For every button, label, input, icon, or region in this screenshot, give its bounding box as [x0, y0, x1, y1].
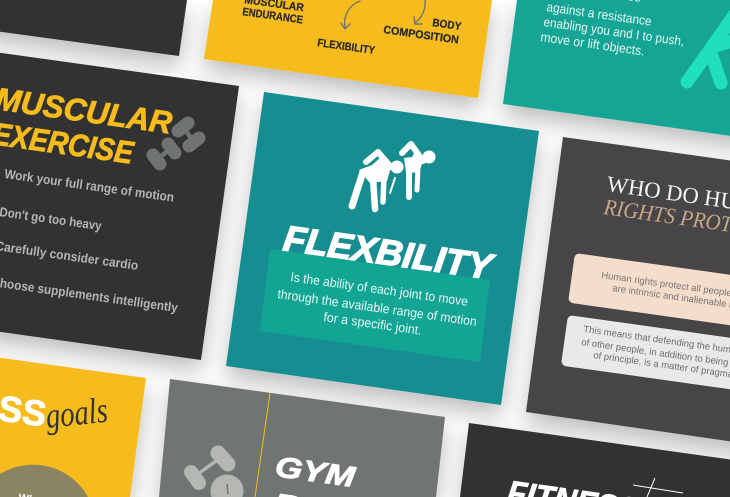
text: definition: for a specific joint. [323, 309, 423, 338]
heading: gym: GYM [273, 451, 358, 494]
text: strength description: enabling you and I to push, [543, 14, 685, 49]
card: muscular exercise [0, 50, 239, 360]
text: definition [277, 269, 478, 338]
card: dark top left [0, 0, 187, 56]
card: gym [159, 379, 445, 497]
label: flexibility: FLEXIBILITY [317, 37, 376, 57]
heading: muscular exercise [0, 80, 175, 171]
text: definition: Is the ability of each joint to move [290, 269, 469, 309]
card: yellow fitness goals [0, 355, 146, 497]
circle: olive badge [0, 465, 88, 497]
list: exercise tips: Don't go too heavy [0, 204, 103, 233]
card: human rights [526, 137, 730, 447]
script: goals: goals [44, 390, 109, 436]
label: body composition: BODY [432, 17, 463, 33]
icon: bright figure [687, 14, 730, 83]
icon: stretching figures [352, 144, 436, 209]
text: strength description: against a resistance [546, 0, 653, 29]
box: grey statement: This means that defending the hum [583, 324, 730, 356]
card: teal strength [503, 0, 730, 140]
text: strength description [540, 0, 685, 59]
label: muscular endurance [242, 0, 305, 26]
list: exercise tips: Work your full range of motion [4, 166, 175, 205]
divider line [255, 393, 270, 497]
label: muscular endurance: ENDURANCE [242, 6, 304, 26]
text: strength description: move or lift objects. [540, 29, 646, 59]
box: grey statement: of principle, is a matter of pragma [593, 350, 730, 381]
list: exercise tips [0, 166, 180, 315]
arrow: to body composition [414, 0, 425, 24]
icon: dumbbell and clock [191, 453, 244, 497]
panel: definition background [260, 249, 490, 362]
box: grey statement [561, 315, 730, 396]
icon: dumbbells [153, 123, 199, 164]
heading: flexbility: FLEXBILITY [281, 217, 498, 288]
heading: who do human rights protect [601, 171, 730, 244]
card: fitness dark [460, 423, 730, 497]
arrow: to flexibility [341, 1, 360, 29]
label: body composition: COMPOSITION [383, 24, 460, 47]
box: peach statement: are intrinsic and inalienable r [612, 283, 730, 311]
text: definition: through the available range of motion [277, 286, 478, 329]
box: grey statement: of other people, in addition to being [581, 337, 729, 369]
box: peach statement: Human rights protect all people [601, 270, 730, 299]
card: flexibility [226, 92, 539, 405]
box: peach statement [568, 253, 730, 333]
card: yellow components of fitness [204, 0, 492, 98]
script flourish [633, 478, 683, 497]
